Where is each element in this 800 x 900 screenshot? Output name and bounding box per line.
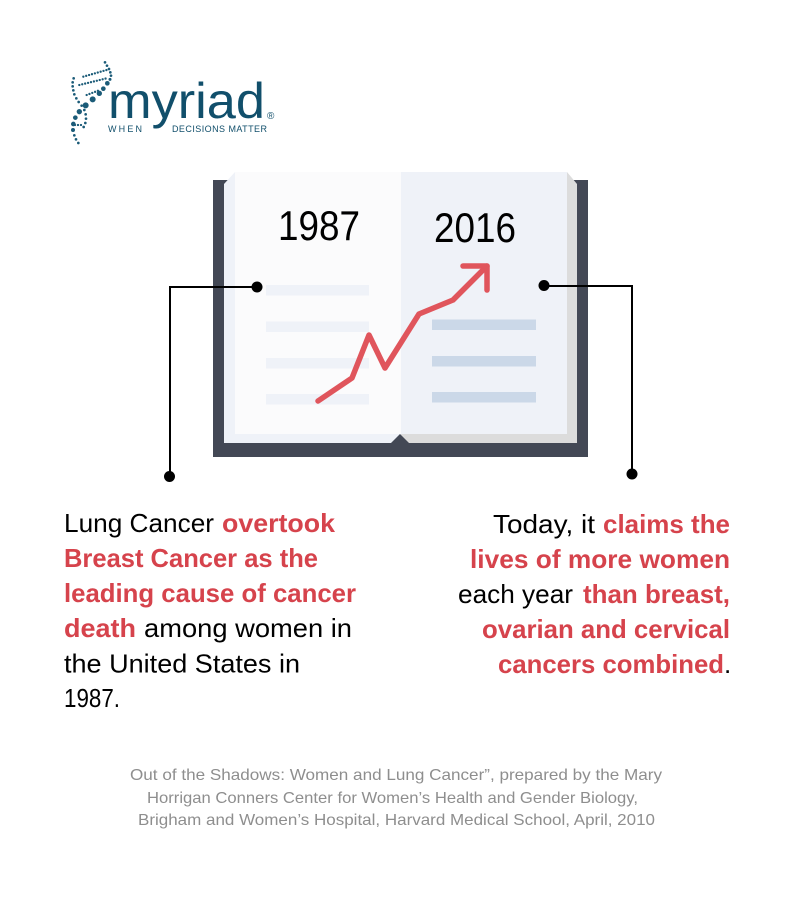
spine notch <box>391 434 409 443</box>
icon: DNA helix <box>71 61 112 144</box>
text block: 1987 statement: leading cause of cancer <box>64 578 356 608</box>
logo: Myriad <box>71 61 275 144</box>
illustration: open book <box>213 172 588 457</box>
text block: 2016 statement: each year <box>458 579 573 609</box>
back pages <box>224 172 401 443</box>
connector: right callout <box>538 280 638 480</box>
text block: 2016 statement: ovarian and cervical <box>482 614 730 644</box>
text block: 1987 statement: Breast Cancer as the <box>64 543 318 573</box>
year 2016: 2016 <box>434 204 516 251</box>
text block: 1987 statement: 1987. <box>64 683 120 713</box>
text block: 2016 statement: Today, it <box>493 509 596 539</box>
text block: 2016 statement: than breast, <box>583 579 730 609</box>
source citation <box>130 767 662 829</box>
source citation: Out of the Shadows: Women and Lung Cancer”, prepared by the Mary <box>130 767 662 784</box>
text block: 2016 statement: cancers combined <box>498 649 724 679</box>
text block: 1987 statement: overtook <box>222 508 336 538</box>
text block: 2016 statement: lives of more women <box>470 544 730 574</box>
text block: 2016 statement: . <box>724 649 731 679</box>
text block: 2016 statement <box>458 509 731 679</box>
left page lines <box>266 285 369 404</box>
book cover <box>213 180 588 457</box>
right page lines <box>432 320 536 402</box>
text block: 1987 statement: death <box>64 613 136 643</box>
logo tagline: WHEN <box>108 124 142 134</box>
text block: 1987 statement: the United States in <box>64 648 300 678</box>
logo tagline <box>108 124 268 134</box>
source citation: Horrigan Conners Center for Women’s Health and Gender Biology, <box>147 790 638 807</box>
connector: left callout <box>164 282 262 482</box>
source citation: Brigham and Women’s Hospital, Harvard Medical School, April, 2010 <box>138 812 655 829</box>
text block: 1987 statement <box>64 508 356 713</box>
left page <box>235 172 401 434</box>
rising trend arrow <box>318 266 487 401</box>
logo wordmark: myriad <box>108 73 265 129</box>
logo tagline: DECISIONS MATTER <box>172 124 268 134</box>
text block: 1987 statement: among women in <box>144 613 352 643</box>
registered mark: ® <box>267 111 275 122</box>
text block: 2016 statement: claims the <box>603 509 730 539</box>
year 1987: 1987 <box>278 202 360 249</box>
right page <box>401 172 567 434</box>
text block: 1987 statement: Lung Cancer <box>64 508 214 538</box>
